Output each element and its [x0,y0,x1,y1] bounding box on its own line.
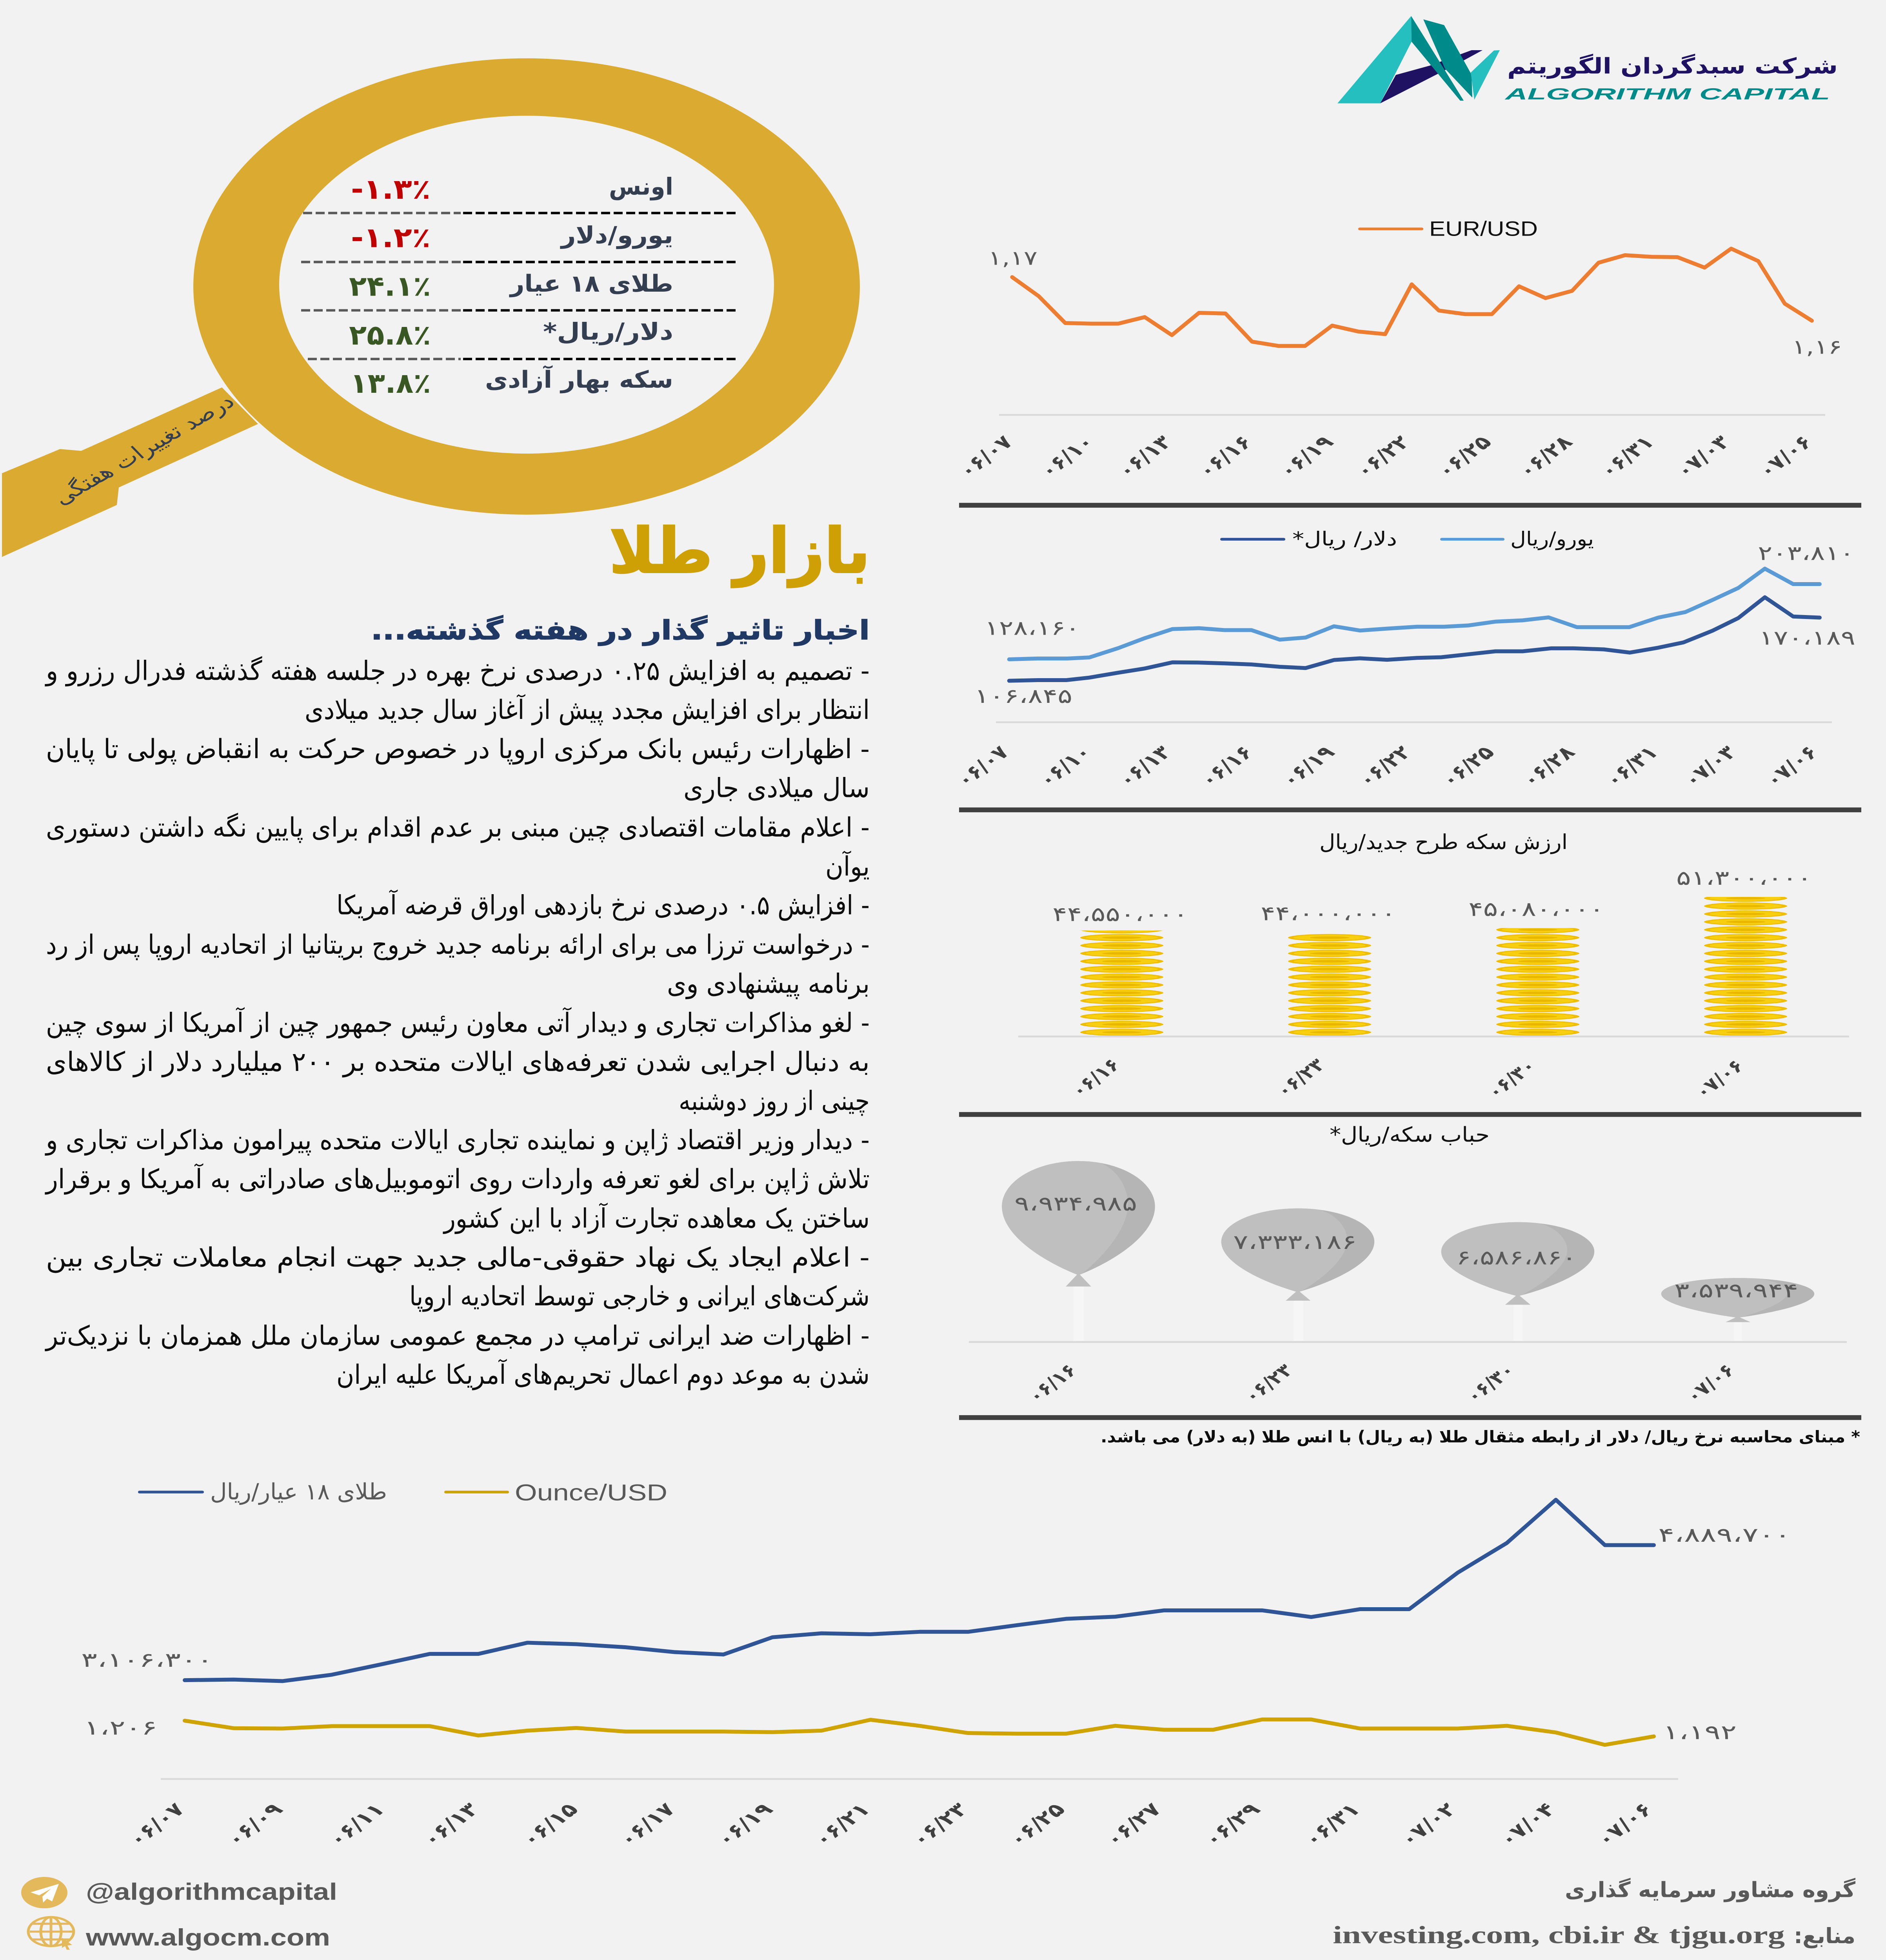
text block: news list: انتظار برای افزایش مجدد پیش از آغاز سال جدید میلادی [305,693,870,726]
x axis labels: ۰۶/۳۱ [1298,1798,1365,1850]
x axis labels [1066,1055,1749,1102]
x axis labels: ۰۶/۲۳ [1239,1360,1298,1406]
x axis labels: ۰۶/۱۱ [323,1798,390,1850]
x axis labels: ۰۶/۰۷ [953,431,1018,482]
text block: news list: - اظهارات ضد ایرانی ترامپ در مجمع عمومی سازمان ملل همزمان با نزدیک‌تر [45,1320,870,1352]
row: dollar rial: ۲۵.۸٪ [349,319,431,351]
x axis labels: ۰۶/۱۳ [417,1798,484,1850]
text block: news list: - اعلام ایجاد یک نهاد حقوقی-مالی جدید جهت انجام معاملات تجاری بین [46,1242,870,1273]
value labels [974,541,1855,708]
x axis labels [1023,1360,1740,1406]
value labels: ۱،۲۰۶ [84,1716,157,1739]
legend: دلار/ ریال* [1292,528,1397,550]
panel: magnifier with weekly changes [2,58,860,557]
text block: news list: تلاش ژاپن برای لغو تعرفه واردات روی اتوموبیل‌های صادراتی به آمریکا و برقرار [45,1163,870,1195]
x axis labels: ۰۷/۰۴ [1494,1798,1561,1850]
x axis labels: ۰۶/۱۹ [1273,431,1339,482]
x axis labels: ۰۶/۲۸ [1512,431,1578,482]
text block: news list: - اظهارات رئیس بانک مرکزی اروپا در خصوص حرکت به انقباض پولی تا پایان [46,733,870,765]
line: ounce [185,1719,1654,1745]
x axis labels: ۰۶/۳۰ [1482,1056,1541,1102]
x axis labels: ۰۶/۲۱ [808,1798,875,1850]
value labels: ۱،۱۹۲ [1663,1720,1737,1744]
line: 18 carat gold [185,1500,1654,1681]
value labels: ۱,۱۶ [1792,335,1842,359]
value labels: ۶،۵۸۶،۸۶۰ [1456,1246,1577,1269]
text block: news list: شرکت‌های ایرانی و خارجی توسط اتحادیه اروپا [409,1281,870,1312]
x axis labels: ۰۷/۰۶ [1752,431,1818,482]
x axis labels: ۰۶/۳۰ [1461,1360,1520,1406]
value labels: ۲۰۳،۸۱۰ [1758,541,1854,565]
row: bahar azadi coin: ۱۳.۸٪ [350,367,431,399]
x axis labels: ۰۷/۰۶ [1690,1056,1749,1102]
text block: news list: شدن به موعد دوم اعمال تحریم‌های آمریکا علیه ایران [336,1358,870,1390]
legend [1358,217,1538,240]
legend: طلای ۱۸ عیار/ریال [210,1479,387,1505]
legend: یورو/ریال [1510,528,1594,550]
x axis labels: ۰۶/۲۲ [1352,741,1416,791]
row: euro dollar: یورو/دلار [560,221,673,249]
chart title: حباب سکه/ریال* [1330,1123,1490,1147]
x axis labels: ۰۶/۲۸ [1516,742,1580,791]
x axis labels: ۰۶/۰۷ [950,742,1014,791]
text block: news list: سال میلادی جاری [683,773,870,804]
row: ounce [351,173,673,206]
x axis labels: ۰۶/۲۳ [906,1798,973,1850]
legend: Ounce/USD [515,1480,667,1505]
chart: coin bubble balloons [969,1123,1847,1406]
x axis labels: ۰۶/۰۷ [123,1798,190,1850]
title: بازار طلا [609,515,870,588]
logo: ALGORITHM CAPITAL [1504,85,1830,103]
x axis labels: ۰۶/۲۵ [1003,1798,1070,1850]
x axis labels: ۰۷/۰۲ [1394,1798,1461,1850]
value labels: ۳،۵۳۹،۹۴۴ [1674,1279,1798,1302]
logo [1337,16,1838,103]
x axis labels: ۰۷/۰۳ [1678,742,1742,791]
value labels [1052,866,1812,926]
line: euro rial [1009,569,1820,659]
x axis labels [953,431,1818,482]
x axis labels: ۰۷/۰۶ [1591,1798,1658,1850]
x axis labels: ۰۶/۳۱ [1599,742,1663,791]
text block: news list: ساختن یک معاهده تجارت آزاد با این کشور [443,1202,870,1234]
value labels: ۴۴،۵۵۰،۰۰۰ [1052,902,1188,926]
row: bahar azadi coin [350,365,673,399]
x axis labels: ۰۶/۱۰ [1033,742,1097,791]
icon: globe [28,1917,74,1950]
value labels: ۱۰۶،۸۴۵ [974,684,1072,708]
x axis labels: ۰۶/۱۶ [1192,431,1257,482]
line: dollar rial [1009,597,1820,681]
x axis labels [123,1798,1658,1850]
text block: news list: - درخواست ترزا می برای ارائه برنامه جدید خروج بریتانیا از اتحادیه اروپا پس از رد [46,929,870,960]
x axis labels: ۰۶/۲۳ [1271,1055,1330,1101]
x axis labels: ۰۶/۲۲ [1350,431,1415,482]
line: EUR/USD [1012,249,1812,346]
x axis labels: ۰۶/۲۹ [1198,1798,1265,1850]
x axis labels: ۰۶/۱۶ [1066,1055,1125,1101]
x axis labels: ۰۷/۰۳ [1670,431,1735,482]
chart title: ارزش سکه طرح جدید/ریال [1319,831,1568,854]
x axis labels: ۰۶/۲۵ [1435,742,1499,791]
value labels [1014,1192,1798,1302]
row: euro dollar [351,221,673,254]
x axis labels: ۰۶/۰۹ [221,1798,288,1850]
text block: news list: - افزایش ۰.۵ درصدی نرخ بازدهی اوراق قرضه آمریکا [336,889,870,921]
text block: news list: - لغو مذاکرات تجاری و دیدار آتی معاون رئیس جمهور چین از آمریکا از سوی چین [46,1007,870,1039]
x axis labels: ۰۷/۰۶ [1681,1360,1740,1406]
value labels: ۴،۸۸۹،۷۰۰ [1658,1523,1791,1546]
sources: منابع: [1794,1924,1855,1948]
x axis labels: ۰۶/۱۶ [1194,742,1258,791]
x axis labels: ۰۶/۱۳ [1112,431,1177,482]
balloons [1002,1161,1814,1341]
heading: news: اخبار تاثیر گذار در هفته گذشته... [371,615,870,646]
row: euro dollar: -۱.۲٪ [351,222,431,254]
row: 18 carat gold: ۲۴.۱٪ [349,270,431,303]
magnifier ring [193,58,860,515]
value labels: ۵۱،۳۰۰،۰۰۰ [1676,866,1812,889]
chart: dollar and euro in rial [950,528,1855,791]
value labels: ۷،۳۳۳،۱۸۶ [1233,1230,1357,1254]
row: ounce: اونس [609,173,673,200]
x axis labels [950,741,1823,791]
text block: news list: برنامه پیشنهادی وی [667,968,870,1000]
text block: news list: - اعلام مقامات اقتصادی چین مبنی بر عدم اقدام برای پایین نگه داشتن دستوری [46,812,870,843]
telegram handle: @algorithmcapital [86,1878,337,1905]
value labels: ۹،۹۳۴،۹۸۵ [1014,1192,1137,1215]
x axis labels: ۰۷/۰۶ [1759,742,1823,791]
row: 18 carat gold: طلای ۱۸ عیار [509,270,673,298]
sources: investing.com, cbi.ir & tjgu.org [1333,1921,1785,1949]
chart: EUR/USD [953,217,1842,482]
x axis labels: ۰۶/۱۰ [1034,431,1099,482]
text block: news list [45,655,870,1390]
row: ounce: -۱.۳٪ [351,173,431,206]
row: dollar rial [349,318,673,351]
table dividers [301,213,736,359]
x axis labels: ۰۶/۲۵ [1431,431,1497,482]
text block: news list: - دیدار وزیر اقتصاد ژاپن و نماینده تجاری ایالات متحده پیرامون مذاکرات تجاری و [45,1125,870,1156]
x axis labels: ۰۶/۱۹ [711,1798,778,1850]
value labels: ۴۵،۰۸۰،۰۰۰ [1468,897,1604,921]
icon: telegram [21,1877,67,1908]
value labels [988,246,1842,359]
legend [1220,528,1594,550]
x axis labels: ۰۶/۳۱ [1594,431,1659,482]
chart: gold and ounce [81,1479,1791,1850]
legend [138,1479,667,1505]
value labels: ۱۷۰،۱۸۹ [1759,626,1855,649]
text block: news list: چینی از روز دوشنبه [679,1085,870,1117]
chart: coin value [1018,831,1849,1102]
x axis labels: ۰۶/۱۵ [516,1798,583,1850]
text block: news list: به دنبال اجرایی شدن تعرفه‌های ایالات متحده بر ۲۰۰ میلیارد دلار از کالاهای [46,1046,870,1078]
x axis labels: ۰۶/۱۶ [1023,1360,1082,1406]
text block: news list: یوآن [825,850,870,882]
row: dollar rial: دلار/ریال* [543,318,673,345]
value labels: ۱۲۸،۱۶۰ [985,616,1080,640]
row: 18 carat gold [349,270,673,303]
logo: شرکت سبدگردان الگوریتم [1507,53,1838,79]
value labels [81,1523,1791,1744]
value labels: ۳،۱۰۶،۳۰۰ [81,1648,213,1671]
coin stacks [1080,897,1787,1036]
magnifier handle [2,387,258,557]
value labels: ۴۴،۰۰۰،۰۰۰ [1261,902,1396,925]
text block: news list: - تصمیم به افزایش ۰.۲۵ درصدی نرخ بهره در جلسه هفته گذشته فدرال رزرو و [45,655,870,687]
handle label: درصد تغییرات هفتگی [47,390,240,509]
x axis labels: ۰۶/۱۳ [1112,742,1176,791]
website: www.algocm.com [85,1924,330,1951]
row: bahar azadi coin: سکه بهار آزادی [485,365,673,394]
x axis labels: ۰۶/۱۷ [613,1798,680,1850]
legend: EUR/USD [1429,217,1538,240]
value labels: ۱,۱۷ [988,246,1037,269]
x axis labels: ۰۶/۲۷ [1099,1798,1166,1850]
x axis labels: ۰۶/۱۹ [1276,742,1340,791]
